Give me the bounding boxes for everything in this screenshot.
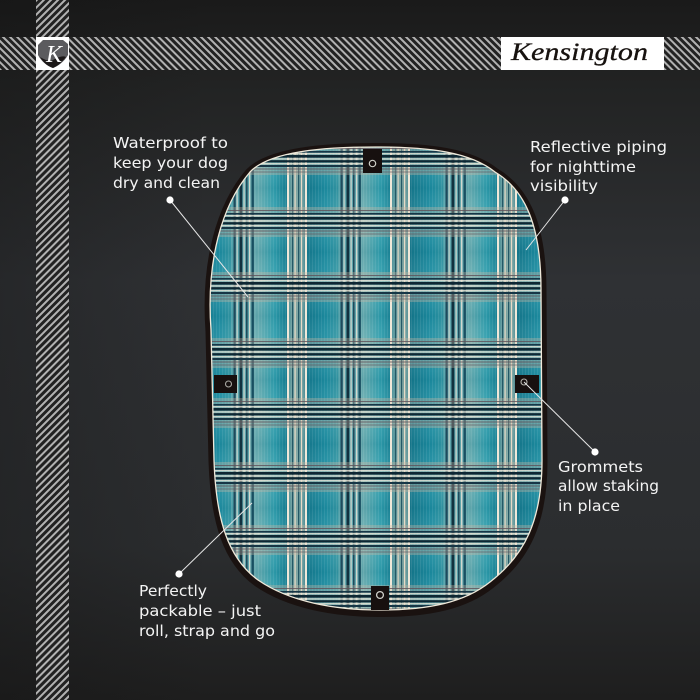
- callout: packable: packable – just: [139, 602, 261, 620]
- grommet patch: left: [214, 375, 237, 393]
- plaid fabric: [210, 148, 542, 610]
- blanket black backing: [210, 148, 542, 612]
- callout: packable: [139, 503, 275, 640]
- callout: reflective piping: Reflective piping: [530, 138, 667, 156]
- Kensington wordmark logo: Kensington: [510, 39, 648, 66]
- callout: grommets: allow staking: [558, 477, 659, 495]
- callout: reflective piping: for nighttime: [530, 158, 636, 176]
- callout: grommets: [524, 382, 659, 515]
- icon: K shield logo: K: [45, 42, 64, 68]
- horizontal hatched band: [0, 37, 700, 70]
- callout: reflective piping: visibility: [530, 177, 598, 195]
- icon: K shield logo: [36, 37, 69, 70]
- callout: waterproof: dry and clean: [113, 174, 220, 192]
- plaid blanket: [190, 140, 560, 620]
- callout: grommets: Grommets: [558, 458, 643, 476]
- grommet patch: right: [515, 375, 539, 393]
- callout: waterproof: Waterproof to: [113, 134, 228, 152]
- callout: reflective piping: [526, 138, 667, 250]
- grommet patch: top: [363, 149, 382, 173]
- reflective piping edge: [210, 147, 542, 610]
- callout: packable: roll, strap and go: [139, 622, 275, 640]
- grommet patch: bottom: [371, 586, 389, 610]
- callout: packable: Perfectly: [139, 582, 207, 600]
- callout: waterproof: [113, 134, 248, 297]
- vertical hatched band: [36, 0, 69, 700]
- callout: waterproof: keep your dog: [113, 154, 228, 172]
- callout: grommets: in place: [558, 497, 620, 515]
- Kensington wordmark logo: [501, 37, 664, 70]
